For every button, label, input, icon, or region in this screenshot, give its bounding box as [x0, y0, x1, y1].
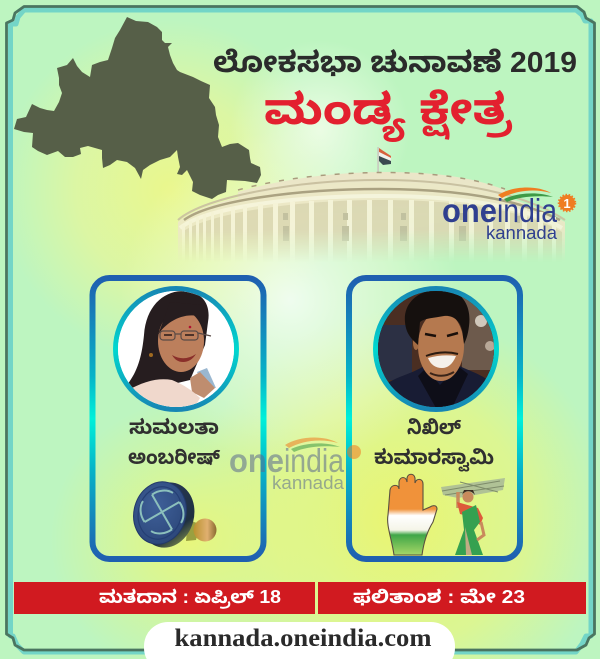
logo: oneindia kannada: one: [442, 192, 497, 229]
portrait: Sumalatha: [116, 290, 236, 412]
date bar: polling: ಮತದಾನ : ಏಪ್ರಿಲ್ 18: [99, 587, 281, 609]
title: Lok Sabha election 2019: ಲೋಕಸಭಾ ಚುನಾವಣೆ 2019: [213, 47, 577, 79]
watermark logo: kannada: [272, 473, 345, 493]
panel: candidate Sumalatha: [92, 278, 264, 559]
panel: candidate Sumalatha: ಅಂಬರೀಷ್: [128, 447, 221, 469]
icon: swastik stamp symbol: [127, 476, 216, 554]
columns: [182, 200, 556, 254]
parliament building: [178, 147, 565, 262]
watermark logo: india: [284, 442, 345, 479]
dome: [238, 172, 505, 200]
icon: woman carrying crop symbol: [441, 478, 505, 555]
date bar: polling: [14, 582, 315, 614]
portrait ring: [376, 288, 496, 410]
logo: oneindia kannada: kannada: [486, 223, 558, 243]
portrait: Nikhil: [376, 290, 496, 410]
flag: [377, 147, 391, 172]
date bar: result: ಫಲಿತಾಂಶ : ಮೇ 23: [353, 587, 525, 607]
panel: candidate Nikhil: ಕುಮಾರಸ್ವಾಮಿ: [374, 447, 494, 472]
website pill: [144, 622, 455, 659]
website pill: kannada.oneindia.com: [174, 625, 432, 652]
map: Mandya constituency: [14, 17, 261, 199]
badge: 1: [563, 196, 571, 211]
date bar: result: [318, 582, 586, 614]
watermark logo: [229, 437, 361, 493]
logo: oneindia kannada: india: [497, 192, 558, 229]
candidate name: ನಿಖಿಲ್: [407, 417, 462, 439]
logo: oneindia kannada: [442, 187, 575, 243]
heading: Mandya constituency: ಮಂಡ್ಯ ಕ್ಷೇತ್ರ: [264, 86, 512, 142]
candidate name: ಸುಮಲತಾ: [129, 417, 219, 439]
icon: hand symbol: [388, 474, 437, 555]
windows: [283, 213, 520, 241]
portrait ring: [116, 288, 236, 410]
panel: candidate Nikhil: [349, 278, 520, 559]
watermark logo: one: [229, 442, 284, 479]
